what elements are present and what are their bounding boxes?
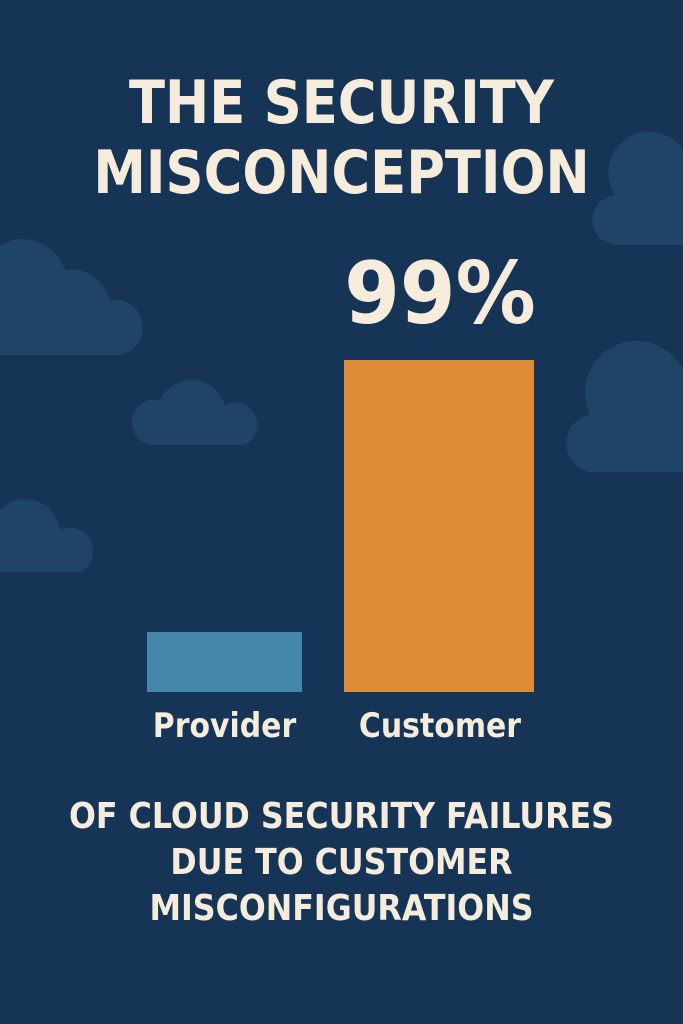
- label: customer: Customer: [359, 706, 521, 746]
- stat: 99%: 99%: [344, 244, 536, 344]
- caption: [69, 796, 614, 929]
- bar: provider: [147, 632, 302, 692]
- caption: OF CLOUD SECURITY FAILURES: [69, 796, 614, 837]
- bar: customer: [344, 360, 534, 692]
- caption: MISCONFIGURATIONS: [149, 888, 534, 929]
- title: THE SECURITY: [129, 68, 554, 138]
- label: provider: Provider: [153, 706, 296, 746]
- title: [93, 68, 590, 208]
- title: MISCONCEPTION: [93, 138, 590, 208]
- caption: DUE TO CUSTOMER: [170, 842, 513, 883]
- bar chart: [147, 360, 534, 746]
